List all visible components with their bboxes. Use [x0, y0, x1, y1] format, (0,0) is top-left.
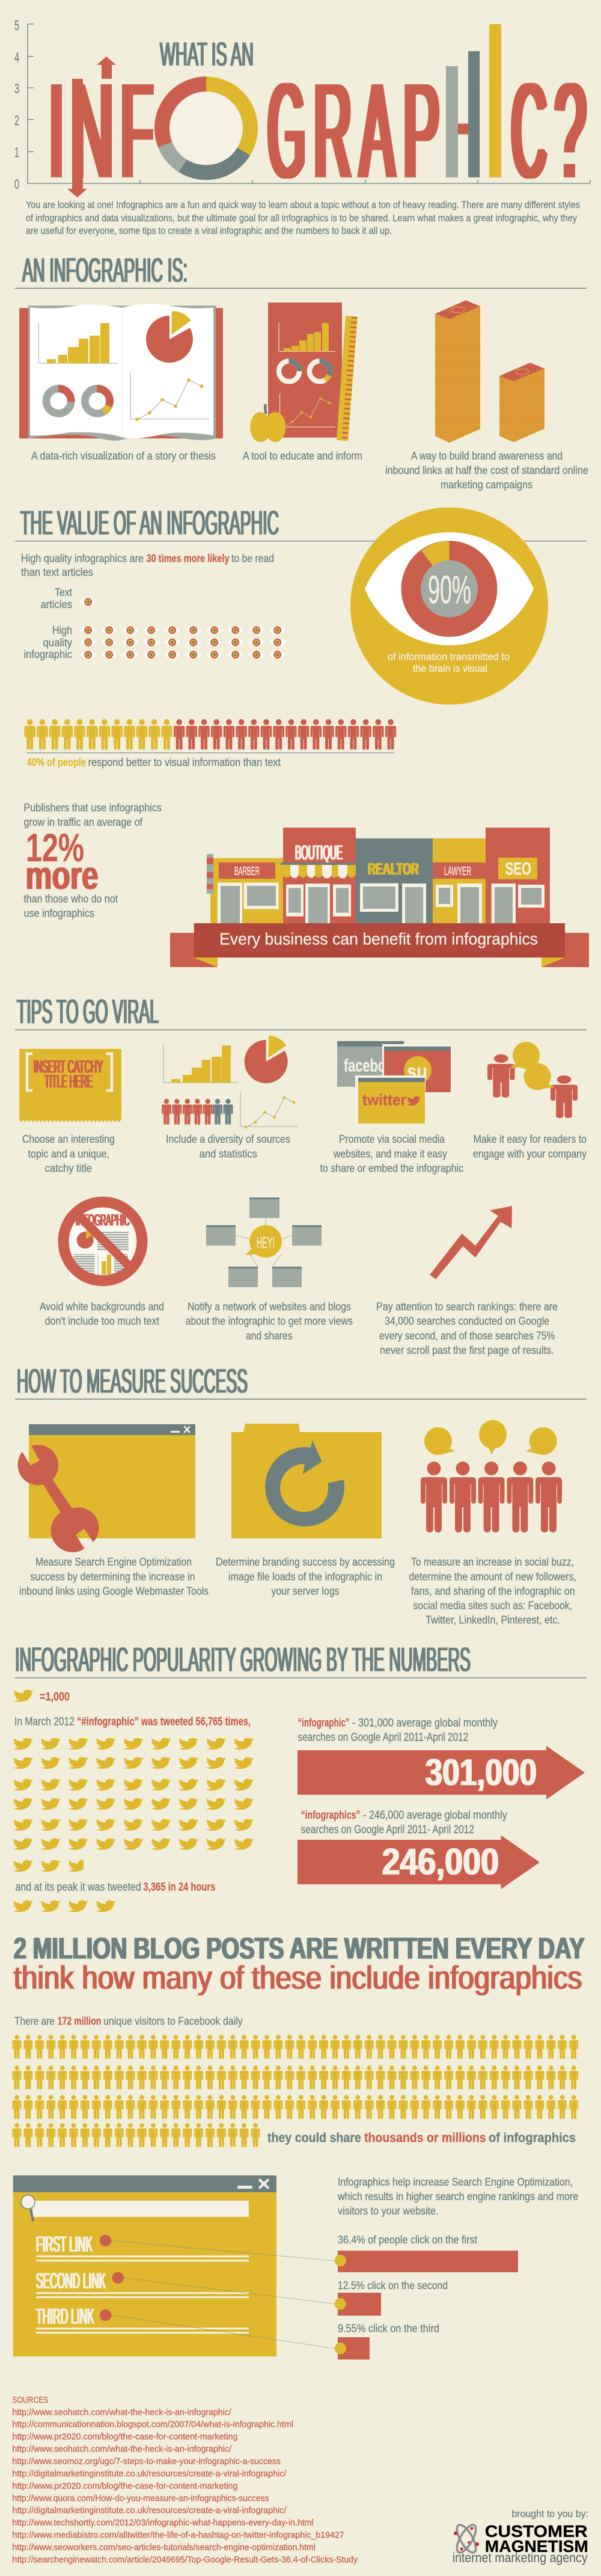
- title word: infographic?: A: [360, 55, 394, 206]
- logo mark: [453, 2522, 480, 2556]
- arrow: 301,000: [297, 1746, 585, 1800]
- tip 1 caption: catchy title: [45, 1162, 92, 1174]
- tip 5: crossed out text-heavy infographic: [64, 1202, 142, 1281]
- title word: infographic?: [49, 24, 586, 206]
- icon: folder with refresh arrow: [231, 1424, 382, 1539]
- intro paragraph: [26, 200, 580, 236]
- ribbon banner: Every business can benefit from infographics: [219, 930, 538, 948]
- search stat: infographics: searches on Google April 2011- April 2012: [301, 1824, 474, 1836]
- title word: infographic?: H: [445, 55, 481, 206]
- bird pictogram grid: [13, 1738, 254, 1872]
- tip 6 caption: about the infographic to get more views: [186, 1315, 353, 1327]
- search stat: infographics: [301, 1809, 507, 1836]
- callout: thousands or millions: thousands or millions: [364, 2130, 486, 2145]
- sources list: http://www.pr2020.com/blog/the-case-for-content-marketing: [12, 2481, 237, 2491]
- title word: infographic?: I: [486, 56, 504, 206]
- search browser window: FIRST LINK: [36, 2231, 93, 2256]
- sources list: http://www.seoworkers.com/seo-articles-tutorials/search-engine-optimization.html: [12, 2542, 316, 2553]
- arrow: 246,000: [297, 1835, 540, 1889]
- shop: barber: [207, 854, 283, 923]
- tip 7 caption: never scroll past the first page of results.: [380, 1344, 554, 1356]
- tip 3: social media windows: twitter: [362, 1091, 406, 1109]
- chart axes with scale 0 to 5: 0: [14, 176, 19, 192]
- title word: infographic?: C: [511, 55, 546, 206]
- tip 1 caption: topic and a unique,: [28, 1148, 109, 1160]
- credit: brought to you by customer magnetism: internet marketing agency: [453, 2550, 588, 2565]
- facebook visitors stat: There are: [14, 2015, 55, 2027]
- tip 7 caption: Pay attention to search rankings: there are: [376, 1301, 558, 1313]
- search stat: infographics: - 246,000 average global monthly: [363, 1809, 507, 1822]
- icon: browser window with wrench: [17, 1424, 195, 1552]
- seo explanation text: which results in higher search engine rankings and more: [337, 2190, 578, 2203]
- stat: 30 times more likely: 30 times more likely: [147, 552, 230, 564]
- caption: search engine optimization: Measure Search Engine Optimization: [35, 1556, 192, 1568]
- tip 3: social media windows: su: [407, 1060, 427, 1083]
- stat: 12 percent more: than those who do not: [24, 893, 118, 905]
- 90 percent eye graphic: of information transmitted to: [388, 651, 510, 663]
- panel: how to measure success: [15, 1362, 587, 1626]
- shop: boutique: [281, 828, 356, 923]
- 90 percent eye graphic: the brain is visual: [413, 663, 487, 674]
- people pictogram: 40 percent: 40% of people: [27, 757, 86, 769]
- stat: 30 times more likely: to be read: [231, 552, 274, 564]
- eye pictogram comparison: [24, 586, 285, 660]
- callout: thousands or millions: [267, 2130, 576, 2145]
- chart axes with scale 0 to 5: 2: [14, 112, 19, 128]
- caption: search engine optimization: inbound links using Google Webmaster Tools: [19, 1585, 209, 1597]
- tip 3 caption: to share or embed the infographic: [320, 1162, 463, 1174]
- dotted connector lines: [111, 2240, 335, 2349]
- tip 4 caption: [473, 1133, 587, 1160]
- panel: the value of an infographic: THE VALUE OF AN INFOGRAPHIC: [20, 504, 279, 543]
- icon: poster with ruler and apple: [250, 303, 358, 442]
- stat: 3,365 in 24 hours: 3,365 in 24 hours: [143, 1881, 215, 1893]
- search stat: infographic: “infographic”: [298, 1717, 350, 1730]
- click-through bar chart: 36.4% of people click on the first: [338, 2234, 477, 2246]
- tip 3 caption: [320, 1133, 463, 1174]
- sources list: [12, 2395, 358, 2565]
- sources list: http://www.seomoz.org/ugc/7-steps-to-make-your-infographic-a-success: [12, 2456, 281, 2467]
- tip 7 caption: 34,000 searches conducted on Google: [385, 1315, 549, 1327]
- seo explanation text: Infographics help increase Search Engine Optimization,: [338, 2176, 573, 2188]
- tip 6 caption: [186, 1301, 353, 1342]
- stat: 12 percent more: 12%: [26, 825, 84, 870]
- caption: social buzz: [409, 1556, 576, 1626]
- title word: infographic?: O: [154, 56, 258, 206]
- chart axes with scale 0 to 5: 5: [14, 17, 19, 33]
- tip 1: catchy title tile: INSERT CATCHY: [34, 1057, 103, 1077]
- tip 6: hey speech bubble network: [206, 1197, 322, 1287]
- legend: bird equals 1,000: =1,000: [40, 1691, 70, 1704]
- shop: barber: BARBER: [234, 865, 260, 878]
- caption: branding success: [216, 1556, 395, 1597]
- 90 percent eye graphic: 90%: [428, 567, 471, 612]
- caption: social buzz: Twitter, LinkedIn, Pinterest, etc.: [426, 1614, 560, 1626]
- caption: branding success: image file loads of the infographic in: [228, 1571, 382, 1583]
- shop: seo: [486, 828, 550, 923]
- icon: people with speech bubbles: [421, 1420, 562, 1532]
- click-through bar chart: 12.5% click on the second: [338, 2279, 448, 2292]
- caption: brand awareness: [385, 450, 588, 491]
- panel: infographic popularity growing by the numbers: [13, 1640, 587, 1912]
- search stat: infographic: searches on Google April 2011-April 2012: [298, 1732, 468, 1744]
- credit: brought to you by customer magnetism: brought to you by:: [511, 2508, 588, 2519]
- shop: lawyer: LAWYER: [444, 865, 471, 878]
- tip 1: catchy title tile: [19, 1049, 121, 1122]
- callout: thousands or millions: they could share: [267, 2130, 361, 2145]
- arrow: 301,000: 301,000: [426, 1752, 537, 1794]
- stat: 30 times more likely: High quality infographics are: [21, 552, 144, 564]
- people pictogram: 40 percent: [24, 719, 396, 769]
- header: what is an infographic chart title: [14, 17, 590, 206]
- title word: infographic?: ?: [555, 55, 586, 206]
- tip 2 caption: Include a diversity of sources: [166, 1133, 290, 1145]
- stat: 12 percent more: [24, 802, 162, 920]
- sources list: http://digitalmarketinginstitute.co.uk/resources/create-a-viral-infographic/: [12, 2468, 287, 2479]
- sources list: http://communicationnation.blogspot.com/2007/04/what-is-infographic.html: [12, 2420, 293, 2430]
- shop: lawyer: [433, 838, 486, 923]
- eye pictogram comparison: quality: [43, 637, 72, 649]
- tip 7: rising arrow: [430, 1206, 512, 1279]
- sources list: http://www.pr2020.com/blog/the-case-for-content-marketing: [12, 2432, 237, 2442]
- click-through bar chart: 9.55% click on the third: [338, 2323, 439, 2335]
- icon: magnifier: [21, 2195, 35, 2221]
- header: what is an infographic chart title: WHAT IS AN: [160, 35, 254, 73]
- intro paragraph: are useful for everyone, some tips to create a viral infographic and the numbers to back it all up.: [26, 226, 392, 236]
- tip 3 caption: Promote via social media: [339, 1133, 445, 1145]
- caption: social buzz: social media sites such as: Facebook,: [413, 1600, 572, 1612]
- tip 4 caption: Make it easy for readers to: [474, 1133, 587, 1145]
- caption: social buzz: fans, and sharing of the infographic on: [411, 1585, 575, 1597]
- facebook visitors stat: 172 million: [58, 2015, 101, 2027]
- sources list: http://www.techshortly.com/2012/03/infographic-what-happens-every-day-in.html: [12, 2518, 314, 2528]
- tip 5 caption: Avoid white backgrounds and: [40, 1301, 164, 1313]
- eye pictogram comparison: infographic: [24, 648, 72, 660]
- peak birds: [13, 1901, 116, 1912]
- stat: 56,765 tweets: In March 2012: [14, 1715, 75, 1728]
- ribbon banner: [170, 923, 589, 967]
- legend: bird equals 1,000: [13, 1689, 70, 1704]
- people pictogram: 40 percent: respond better to visual information than text: [88, 757, 281, 769]
- click-through bar chart: [335, 2234, 518, 2359]
- tip 3: social media windows: facebo: [344, 1056, 386, 1076]
- stat: 56,765 tweets: “#infographic” was tweeted 56,765 times,: [77, 1715, 251, 1728]
- caption: social buzz: To measure an increase in social buzz,: [411, 1556, 574, 1568]
- tip 3 caption: websites, and make it easy: [333, 1148, 447, 1160]
- people pictogram rows: [12, 2035, 578, 2147]
- arrow: 246,000: 246,000: [382, 1842, 499, 1883]
- tip 5 caption: [40, 1301, 164, 1327]
- stat: 12 percent more: more: [25, 853, 99, 897]
- caption: brand awareness: A way to build brand awareness and: [411, 450, 563, 462]
- tip 6: hey speech bubble network: HEY!: [257, 1234, 275, 1252]
- stat: 3,365 in 24 hours: and at its peak it was tweeted: [16, 1881, 141, 1893]
- facebook visitors stat: [14, 2015, 243, 2027]
- tip 1: catchy title tile: TITLE HERE: [44, 1072, 93, 1092]
- tip 2 caption: [166, 1133, 290, 1160]
- caption: data-rich visualization: A data-rich visualization of a story or thesis: [31, 450, 216, 462]
- panel: tips to go viral: TIPS TO GO VIRAL: [17, 992, 159, 1031]
- seo explanation text: visitors to your website.: [338, 2205, 439, 2217]
- caption: branding success: Determine branding success by accessing: [216, 1556, 395, 1568]
- chart axes with scale 0 to 5: 1: [14, 144, 19, 160]
- caption: social buzz: determine the amount of new followers,: [409, 1571, 576, 1583]
- panel: an infographic is: [15, 251, 588, 491]
- search browser window: [13, 2175, 276, 2356]
- panel: 2 million blog posts: [12, 1932, 585, 2147]
- tip 1 caption: [22, 1133, 115, 1174]
- N stem arrows: [67, 57, 116, 197]
- tip 7 caption: [376, 1301, 558, 1356]
- donut letter O: [154, 76, 258, 180]
- shop: boutique: BOUTIQUE: [295, 841, 343, 864]
- panel: tips to go viral: [15, 992, 587, 1356]
- title word: infographic?: F: [121, 56, 153, 206]
- tip 7 caption: every second, and of those searches 75%: [379, 1330, 555, 1342]
- panel: the value of an infographic: [15, 504, 589, 967]
- title word: infographic?: R: [314, 56, 352, 206]
- facebook visitors stat: unique visitors to Facebook daily: [103, 2015, 243, 2027]
- search stat: infographic: [298, 1717, 498, 1744]
- shop: seo: SEO: [505, 859, 531, 879]
- title word: infographic?: P: [403, 55, 439, 206]
- sources list: http://searchenginewatch.com/article/2049695/Top-Google-Result-Gets-36.4-of-Clicks-Study: [12, 2555, 358, 2565]
- tip 5: crossed out text-heavy infographic: INFOGRAPHIC: [76, 1211, 130, 1229]
- 90 percent eye graphic: [350, 508, 548, 705]
- icon: stacks of money: [435, 300, 545, 443]
- illustration: row of shops: [170, 828, 589, 967]
- caption: brand awareness: marketing campaigns: [441, 479, 532, 491]
- credit: brought to you by customer magnetism: CUSTOMER: [485, 2522, 588, 2541]
- sources list: SOURCES: [12, 2395, 48, 2405]
- tip 6 caption: Notify a network of websites and blogs: [188, 1301, 351, 1313]
- chart axes with scale 0 to 5: [14, 17, 590, 192]
- search browser window: SECOND LINK: [36, 2268, 106, 2293]
- stat: 12 percent more: use infographics: [24, 908, 94, 920]
- chart axes with scale 0 to 5: 4: [14, 49, 19, 65]
- panel: search results and click rates: [13, 2175, 578, 2359]
- shop: realtor: [356, 838, 433, 923]
- tip 4 caption: engage with your company: [473, 1148, 587, 1160]
- credit: brought to you by customer magnetism: MAGNETISM: [485, 2537, 588, 2556]
- sources list: http://www.mediabistro.com/alltwitter/the-life-of-a-hashtag-on-twitter-infographic_b19427: [12, 2530, 344, 2541]
- chart axes with scale 0 to 5: 3: [14, 81, 19, 96]
- tip 5 caption: don't include too much text: [45, 1315, 159, 1327]
- title word: infographic?: N: [70, 55, 114, 206]
- panel: how to measure success: HOW TO MEASURE SUCCESS: [17, 1362, 248, 1401]
- eye pictogram comparison: articles: [41, 598, 72, 610]
- stat: 56,765 tweets: [14, 1715, 251, 1728]
- eye pictogram comparison: High: [52, 624, 72, 636]
- caption: search engine optimization: [19, 1556, 209, 1597]
- stat: 12 percent more: Publishers that use infographics: [24, 802, 162, 814]
- sources list: http://www.seohatch.com/what-the-heck-is-an-infographic/: [12, 2407, 232, 2417]
- search stat: infographics: “infographics”: [301, 1809, 361, 1822]
- seo explanation text: [337, 2176, 578, 2217]
- eye pictogram comparison: Text: [55, 586, 72, 598]
- panel: an infographic is: AN INFOGRAPHIC IS:: [22, 251, 188, 289]
- shop: realtor: REALTOR: [368, 859, 419, 878]
- search browser window: THIRD LINK: [36, 2304, 94, 2328]
- title word: infographic?: I: [49, 55, 64, 206]
- caption: search engine optimization: success by determining the increase in: [30, 1571, 195, 1583]
- sources list: http://digitalmarketinginstitute.co.uk/resources/create-a-viral-infographic/: [12, 2506, 287, 2516]
- stat: 12 percent more: grow in traffic an average of: [24, 816, 143, 828]
- credit: brought to you by customer magnetism: [453, 2508, 588, 2565]
- sources list: http://www.seohatch.com/what-the-heck-is-an-infographic/: [12, 2444, 232, 2455]
- caption: tool to educate: A tool to educate and inform: [243, 450, 362, 462]
- tip 4: people talking: [487, 1042, 578, 1118]
- icon: open book with charts: [19, 304, 223, 441]
- callout: thousands or millions: of infographics: [489, 2130, 576, 2145]
- search stat: infographic: - 301,000 average global monthly: [352, 1717, 498, 1730]
- tip 2: diversity of charts: [162, 1036, 299, 1128]
- tip 3: social media windows: [337, 1041, 452, 1124]
- tip 2 caption: and statistics: [200, 1148, 257, 1160]
- title word: infographic?: G: [268, 55, 305, 206]
- tip 1 caption: Choose an interesting: [22, 1133, 115, 1145]
- bar letters H and I: [446, 24, 501, 177]
- caption: branding success: your server logs: [272, 1585, 339, 1597]
- stat: 30 times more likely: than text articles: [21, 566, 93, 578]
- tip 6 caption: and shares: [246, 1330, 293, 1342]
- sources list: http://www.quora.com/How-do-you-measure-an-infographics-success: [12, 2493, 269, 2503]
- stat: 30 times more likely: [21, 552, 274, 578]
